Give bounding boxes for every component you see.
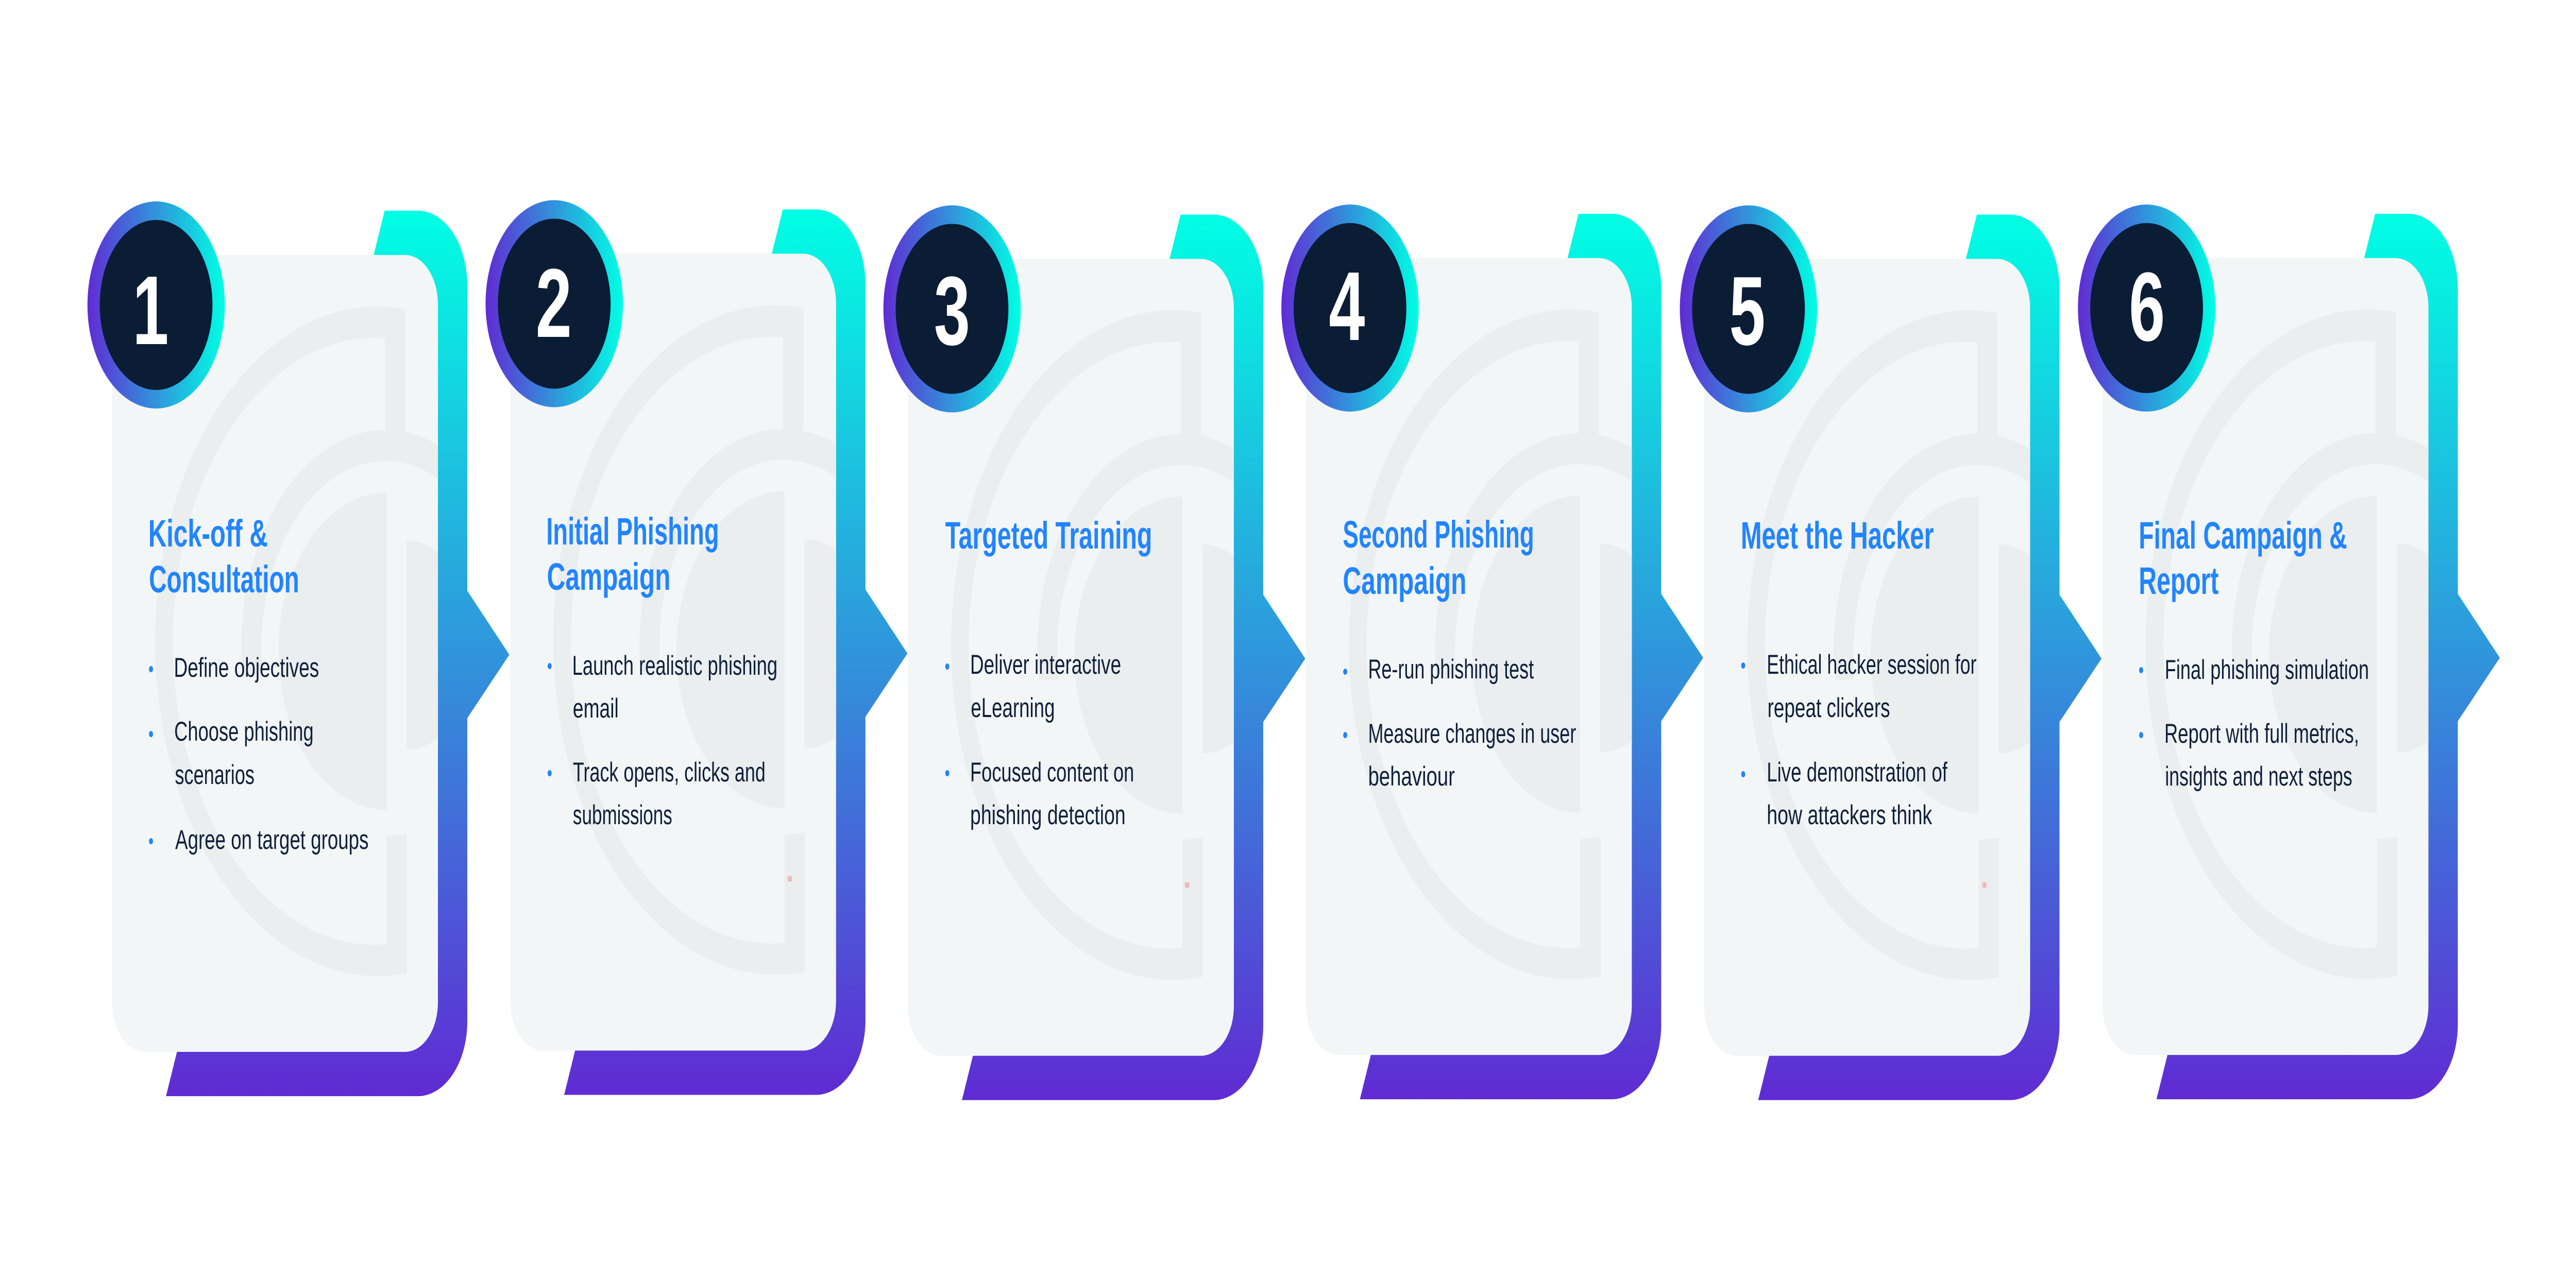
- number badge 2: 2: [536, 249, 572, 358]
- heading: step 1: Consultation: [149, 558, 299, 601]
- bullet list: step 6: Report with full metrics,: [2164, 718, 2359, 749]
- heading: step 6: Report: [2139, 560, 2219, 603]
- heading: step 5: Meet the Hacker: [1741, 515, 1934, 557]
- bullet list: step 1: Choose phishing: [174, 716, 314, 747]
- bullet list: step 5: Ethical hacker session for: [1767, 649, 1976, 680]
- gradient frame with arrow 2: [564, 209, 907, 1095]
- gradient frame with arrow 4: [1360, 214, 1703, 1099]
- gradient frame with arrow 6: [2157, 214, 2500, 1099]
- bullet list: step 2: Track opens, clicks and: [573, 757, 766, 788]
- bullet list: step 3: eLearning: [971, 692, 1055, 723]
- bullet list: step 6: [2139, 654, 2369, 792]
- number badge 3: 3: [934, 257, 970, 366]
- bullet list: step 1: scenarios: [175, 759, 255, 790]
- panel: step 3 targeted training: [884, 206, 1305, 1100]
- number badge 3: [884, 206, 1021, 413]
- number badge 6: 6: [2129, 252, 2165, 362]
- number badge 5: 5: [1729, 257, 1765, 366]
- bullet list: step 6: Final phishing simulation: [2165, 654, 2369, 685]
- bullet list: step 5: Live demonstration of: [1767, 757, 1947, 788]
- bullet list: step 4: behaviour: [1368, 761, 1455, 792]
- marker: small red box: [1982, 883, 1986, 887]
- bullet list: step 1: [149, 652, 368, 855]
- marker: small red box: [788, 877, 791, 881]
- card 1: [112, 255, 476, 1052]
- heading: step 2: Initial Phishing: [546, 510, 719, 553]
- bullet list: step 2: email: [573, 693, 619, 724]
- number badge 1: 1: [132, 256, 168, 365]
- number badge 4: 4: [1329, 252, 1365, 361]
- heading: step 1: [148, 513, 299, 601]
- heading: step 4: Second Phishing: [1343, 514, 1534, 556]
- bullet list: step 4: Re-run phishing test: [1368, 654, 1534, 685]
- card 6: [2103, 258, 2466, 1055]
- gradient frame with arrow 5: [1758, 215, 2102, 1100]
- panel: step 5 meet the hacker: [1680, 206, 2102, 1100]
- heading: step 3: Targeted Training: [945, 515, 1152, 557]
- bullet list: step 2: Launch realistic phishing: [572, 650, 777, 681]
- heading: step 4: [1343, 514, 1534, 603]
- card 4: [1306, 258, 1670, 1055]
- bullet list: step 5: repeat clickers: [1768, 692, 1890, 723]
- heading: step 1: Kick-off &: [148, 513, 268, 555]
- heading: step 2: [546, 510, 719, 599]
- number badge 2: [486, 200, 623, 407]
- bullet list: step 1: Agree on target groups: [175, 824, 368, 855]
- card 5: [1704, 259, 2068, 1056]
- panel: step 1 kick-off and consultation: [88, 201, 510, 1096]
- bullet list: step 3: [945, 649, 1134, 830]
- bullet list: step 4: [1343, 654, 1576, 792]
- number badge 4: [1281, 205, 1419, 412]
- panel: step 4 second phishing campaign: [1281, 205, 1703, 1099]
- number badge 6: [2078, 205, 2215, 412]
- bullet list: step 6: insights and next steps: [2165, 761, 2352, 792]
- number badge 5: [1680, 206, 1817, 413]
- marker: small red box: [1185, 883, 1189, 887]
- panel: step 6 final campaign and report: [2078, 205, 2500, 1099]
- bullet list: step 5: how attackers think: [1767, 799, 1933, 830]
- panel: step 2 initial phishing campaign: [486, 200, 907, 1095]
- bullet list: step 5: [1741, 649, 1976, 830]
- bullet list: step 3: Focused content on: [970, 757, 1134, 788]
- bullet list: step 3: Deliver interactive: [970, 649, 1121, 680]
- bullet list: step 4: Measure changes in user: [1368, 718, 1576, 749]
- gradient frame with arrow 1: [166, 211, 510, 1096]
- card 2: [510, 253, 874, 1051]
- heading: step 6: [2139, 515, 2347, 603]
- heading: step 4: Campaign: [1343, 560, 1466, 603]
- heading: step 2: Campaign: [547, 556, 671, 599]
- bullet list: step 2: submissions: [573, 799, 672, 830]
- bullet list: step 3: phishing detection: [970, 799, 1126, 830]
- gradient frame with arrow 3: [962, 215, 1305, 1100]
- number badge 1: [88, 201, 225, 408]
- bullet list: step 1: Define objectives: [174, 652, 319, 683]
- card 3: [908, 259, 1272, 1056]
- heading: step 6: Final Campaign &: [2139, 515, 2347, 557]
- bullet list: step 2: [548, 650, 777, 830]
